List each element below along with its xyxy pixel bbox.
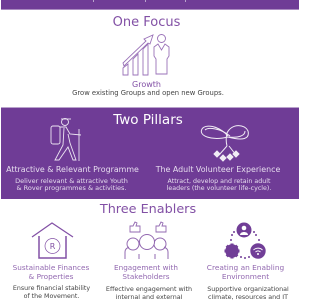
label: Engagement with Stakeholders xyxy=(114,263,178,280)
text: volunteer description: leaders (the volunteer life-cycle). xyxy=(167,185,271,192)
heading: Two Pillars: Two Pillars xyxy=(113,112,183,128)
text: growth description: Grow existing Groups and open new Groups. xyxy=(72,89,224,97)
label: Creating an Enabling Environment: Environment xyxy=(222,272,269,280)
heading: One Focus: One Focus xyxy=(113,15,180,30)
label: Engagement with Stakeholders: Engagement with xyxy=(114,263,178,272)
label: Sustainable Finances & Properties: Sustainable Finances xyxy=(13,263,89,272)
text: engagement description xyxy=(106,285,192,300)
heading: Three Enablers: Three Enablers xyxy=(100,202,196,217)
label: The Adult Volunteer Experience: The Adult Volunteer Experience xyxy=(156,164,280,174)
text: environment description: Supportive organizational xyxy=(207,286,289,293)
label: Creating an Enabling Environment: Creating an Enabling xyxy=(207,263,284,272)
text: finances description xyxy=(13,285,90,300)
text: finances description: Ensure financial stability xyxy=(13,285,90,292)
label: Growth: Growth xyxy=(132,80,161,89)
label: Creating an Enabling Environment xyxy=(207,263,284,280)
text: environment description xyxy=(207,286,289,300)
label: Attractive & Relevant Programme: Attractive & Relevant Programme xyxy=(6,164,139,174)
text: finances description: of the Movement. xyxy=(24,292,79,300)
two pillars band xyxy=(1,107,299,199)
top banner xyxy=(1,0,299,10)
label: Sustainable Finances & Properties xyxy=(13,263,89,280)
text: programme description: Deliver relevant & attractive Youth xyxy=(15,177,128,185)
icon: house with R: R xyxy=(50,242,56,251)
text: programme description: & Rover programmes & activities. xyxy=(17,184,126,192)
label: Engagement with Stakeholders: Stakeholders xyxy=(122,272,170,280)
text: volunteer description xyxy=(167,178,271,192)
text: programme description xyxy=(15,177,128,192)
text: engagement description: Effective engagement with xyxy=(106,285,192,293)
label: Sustainable Finances & Properties: & Properties xyxy=(29,272,73,280)
text: volunteer description: Attract, develop and retain adult xyxy=(168,178,270,185)
